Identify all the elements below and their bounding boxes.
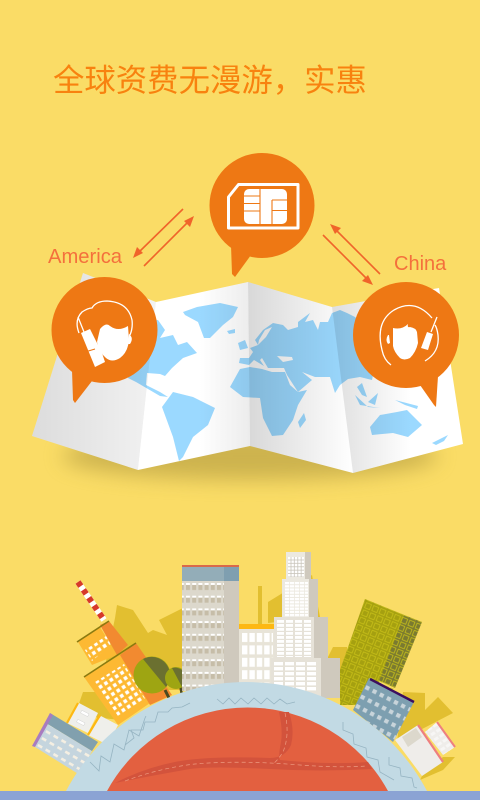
continents	[120, 303, 448, 461]
SIM card bubble	[210, 153, 314, 277]
blue building	[353, 678, 414, 742]
world map	[32, 273, 463, 480]
pink white buildings right	[395, 722, 455, 776]
background silhouettes	[75, 575, 455, 780]
stepped tower	[271, 552, 340, 698]
arrows: America to SIM	[133, 209, 194, 266]
grey blue building left	[32, 713, 98, 775]
zigzag lines	[90, 698, 417, 788]
icon: person with phone	[77, 301, 132, 367]
city illustration	[0, 552, 480, 800]
icon: person with headset	[380, 306, 438, 365]
map fold shading	[32, 273, 463, 473]
trees	[134, 656, 187, 698]
small white buildings left	[67, 703, 118, 745]
road	[115, 712, 372, 783]
icon: SIM card	[228, 184, 298, 228]
inland seas	[258, 327, 293, 362]
America person bubble	[52, 277, 158, 403]
label: China: China	[394, 253, 447, 275]
bottom bar	[0, 791, 480, 800]
orange factory lower	[84, 643, 172, 725]
chimney	[78, 582, 104, 620]
orange factory upper	[77, 621, 128, 665]
map shadow	[62, 432, 438, 480]
globe outer ring	[66, 682, 427, 791]
map paper	[32, 273, 463, 473]
globe red land	[107, 708, 388, 791]
arrows: SIM to China	[323, 224, 380, 285]
tall grey building	[182, 565, 239, 691]
green building	[340, 599, 422, 705]
China person bubble	[353, 282, 459, 407]
title: 全球资费无漫游，实惠	[53, 63, 367, 98]
middle white building	[239, 624, 275, 689]
label: America: America	[48, 246, 123, 268]
